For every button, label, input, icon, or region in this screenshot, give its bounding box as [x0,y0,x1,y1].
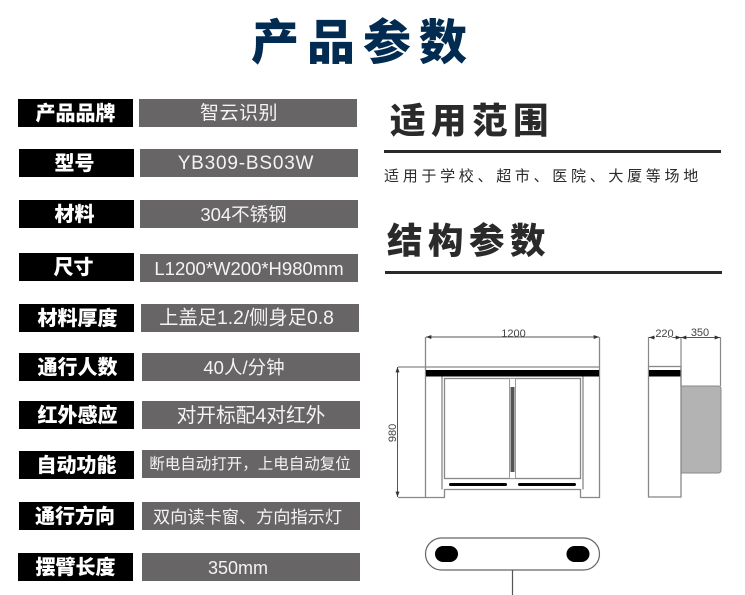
label: 尺寸 [54,257,94,279]
top view drawing [426,538,600,595]
value [140,200,358,228]
value: 350mm [208,558,268,578]
label: 红外感应 [38,405,118,427]
value: L1200*W200*H980mm [154,258,344,279]
value: 304不锈钢 [200,204,287,225]
value: 上盖足1.2/侧身足0.8 [159,308,334,329]
label [18,553,133,581]
value [142,450,360,478]
value [140,149,358,177]
label [19,304,134,332]
spec row: 自动功能 [19,450,360,479]
title: 产品参数 [251,17,475,70]
text: applicable range: 适用于学校、超市、医院、大厦等场地 [384,168,702,185]
heading: 适用范围: 适用范围 [390,101,554,141]
spec row: 通行方向 [19,502,360,530]
label [18,99,133,127]
value: 断电自动打开，上电自动复位 [149,456,351,473]
heading: 结构参数: 结构参数 [387,221,551,261]
spec row: 型号 [19,149,358,177]
value: 对开标配4对红外 [177,405,325,427]
value: 双向读卡窗、方向指示灯 [153,507,342,527]
spec row: 材料厚度 [19,304,359,332]
label: 自动功能 [36,455,116,477]
spec row: 通行人数 [19,353,360,381]
label: 材料厚度 [38,308,118,330]
value [142,353,360,381]
label: 型号 [54,153,94,175]
label: 摆臂长度 [36,557,116,579]
spec row: 摆臂长度 [18,553,360,581]
label: 产品品牌 [36,103,116,125]
value [141,304,359,332]
value [140,254,358,282]
label [19,200,134,228]
value [142,401,360,429]
dimension: 1200: 1200 [501,328,526,340]
value [139,99,357,127]
spec row: 红外感应 [19,401,360,429]
label: 通行方向 [35,506,115,528]
label [19,149,134,177]
spec row: 尺寸 [19,253,358,282]
spec row: 材料 [19,200,358,228]
value [142,553,360,581]
label [19,502,134,530]
label [19,451,134,479]
value: YB309-BS03W [178,153,314,174]
label: 材料 [54,204,94,226]
value [142,502,360,530]
label [19,353,134,381]
label [19,401,134,429]
dimension: 220: 220 [655,328,674,340]
label [19,253,134,281]
dimension: 350: 350 [691,327,709,339]
side view drawing [648,327,721,497]
label: 通行人数 [38,357,118,379]
value: 智云识别 [200,103,278,124]
spec row: 产品品牌 [18,99,357,127]
front view drawing [387,328,600,498]
value: 40人/分钟 [203,357,285,378]
dimension: 980: 980 [387,424,399,442]
